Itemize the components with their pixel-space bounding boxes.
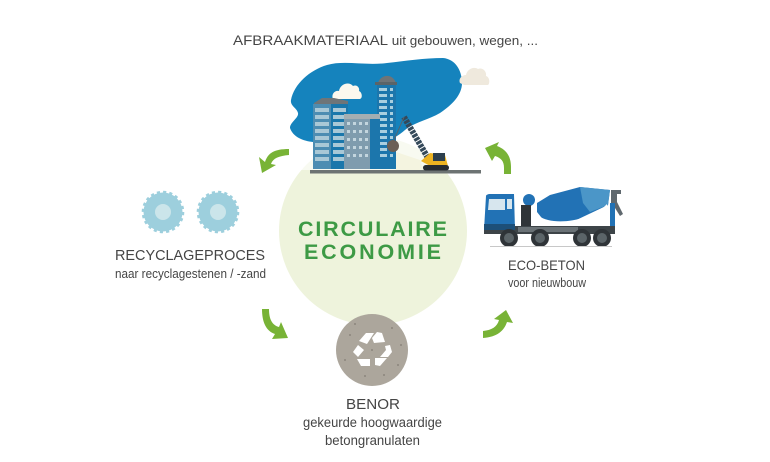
label: eco concrete bbox=[508, 257, 587, 290]
label: benor: betongranulaten bbox=[325, 433, 420, 448]
icon: recycled concrete disc bbox=[336, 314, 408, 386]
label: benor bbox=[303, 397, 442, 448]
road bbox=[310, 170, 481, 174]
cloud on skyline bbox=[332, 84, 362, 99]
crane with wrecking ball bbox=[387, 117, 449, 170]
label: recycling process: RECYCLAGEPROCES bbox=[115, 248, 265, 264]
icon: gears bbox=[143, 192, 238, 232]
label: recycling process: naar recyclagestenen / -zand bbox=[115, 266, 266, 281]
concrete speckles bbox=[344, 323, 402, 377]
arrow: bottom right bbox=[483, 310, 513, 338]
illustration: city demolition bbox=[290, 58, 489, 174]
center heading bbox=[298, 217, 447, 264]
label: recycling process bbox=[115, 248, 266, 281]
label: eco concrete: voor nieuwbouw bbox=[508, 276, 587, 290]
illustration: concrete mixer truck bbox=[484, 187, 623, 247]
label: benor: BENOR bbox=[346, 397, 400, 413]
mixer drum bbox=[537, 187, 610, 223]
cloud right bbox=[460, 68, 489, 85]
truck wheels bbox=[502, 231, 609, 245]
recycling symbol bbox=[353, 332, 392, 366]
truck rear equipment bbox=[611, 190, 623, 224]
left building bbox=[313, 98, 348, 169]
central circle bbox=[270, 130, 480, 325]
label: benor: gekeurde hoogwaardige bbox=[303, 415, 442, 430]
blue blob background bbox=[290, 58, 462, 142]
arrow: top left bbox=[259, 149, 289, 173]
arrow: top right bbox=[485, 142, 511, 174]
truck cab bbox=[484, 194, 515, 230]
pale dust wedge bbox=[396, 152, 424, 171]
tall tower bbox=[375, 76, 397, 169]
middle building bbox=[344, 114, 380, 169]
title: AFBRAAKMATERIAAL uit gebouwen, wegen, ... bbox=[233, 32, 538, 48]
center heading: CIRCULAIRE bbox=[298, 217, 447, 241]
label: eco concrete: ECO-BETON bbox=[508, 257, 585, 273]
truck shadow line bbox=[490, 246, 612, 247]
center heading: ECONOMIE bbox=[304, 240, 441, 264]
arrow: bottom left bbox=[262, 309, 288, 339]
truck chassis bbox=[484, 226, 615, 234]
